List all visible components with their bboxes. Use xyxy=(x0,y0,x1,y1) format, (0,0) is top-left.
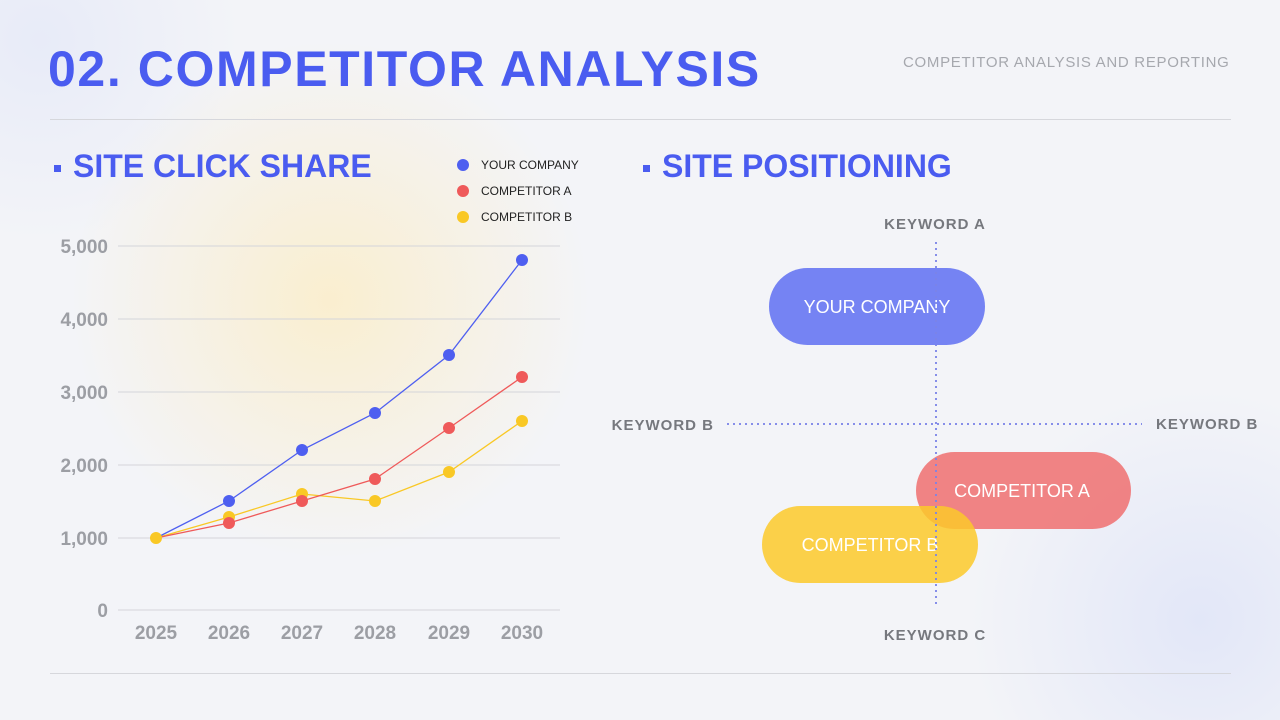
positioning map: KEYWORD C xyxy=(884,627,986,644)
legend: COMPETITOR A xyxy=(481,184,571,198)
legend: COMPETITOR B xyxy=(481,210,572,224)
heading: site positioning: SITE POSITIONING xyxy=(662,148,952,184)
line chart: 1,000 xyxy=(60,529,108,550)
line chart: 2029 xyxy=(428,623,470,644)
pill: competitor b xyxy=(762,506,978,583)
line chart: 2028 xyxy=(354,623,396,644)
line chart: 2,000 xyxy=(60,456,108,477)
line chart: 2025 xyxy=(135,623,178,644)
legend xyxy=(457,158,579,224)
line chart: 2027 xyxy=(281,623,323,644)
title: 02. COMPETITOR ANALYSIS xyxy=(48,41,761,97)
line chart: 2026 xyxy=(208,623,250,644)
positioning map: KEYWORD B xyxy=(1156,416,1258,433)
line chart: 2030 xyxy=(501,623,543,644)
pill: competitor a: COMPETITOR A xyxy=(954,481,1090,501)
positioning map: KEYWORD B xyxy=(612,417,714,434)
line chart: 5,000 xyxy=(60,237,108,258)
pill: your company: YOUR COMPANY xyxy=(804,297,950,317)
pill: competitor a xyxy=(916,452,1131,529)
legend: YOUR COMPANY xyxy=(481,158,579,172)
line chart: 0 xyxy=(97,601,108,622)
subtitle: COMPETITOR ANALYSIS AND REPORTING xyxy=(903,54,1230,71)
line chart: 3,000 xyxy=(60,383,108,404)
heading: site click share: SITE CLICK SHARE xyxy=(73,148,372,184)
line chart: 4,000 xyxy=(60,310,108,331)
pill: competitor b: COMPETITOR B xyxy=(802,535,938,555)
positioning map: KEYWORD A xyxy=(884,216,986,233)
pill: your company xyxy=(769,268,985,345)
